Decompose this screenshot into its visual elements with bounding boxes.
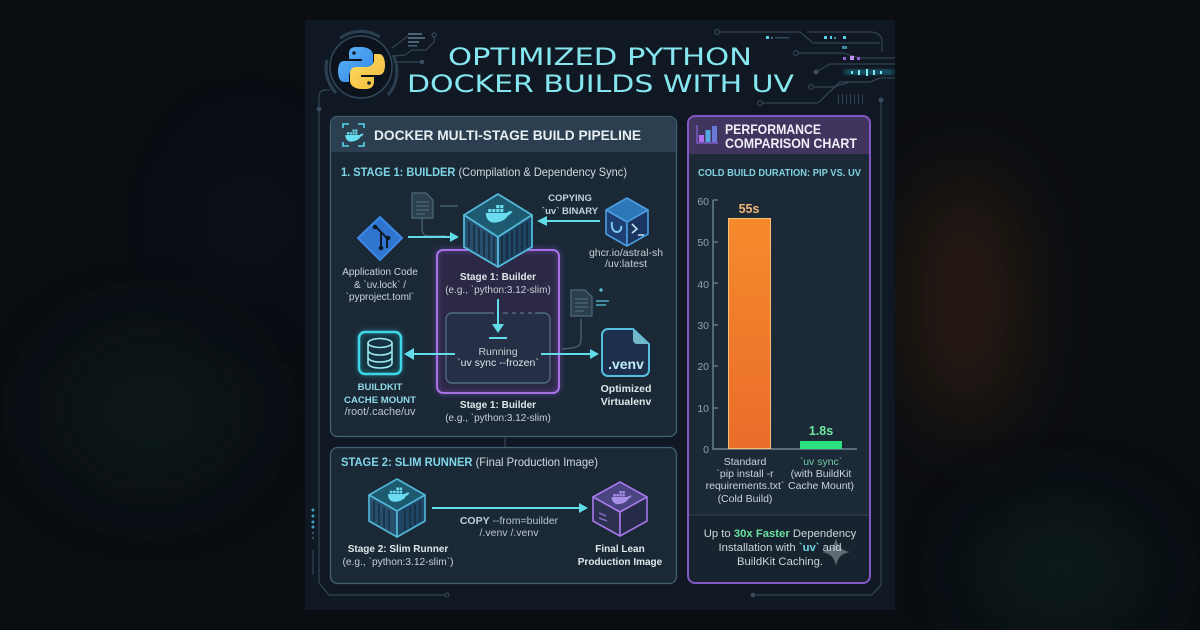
title: OPTIMIZED PYTHON	[448, 43, 752, 71]
application code label: `pyproject.toml`	[346, 291, 414, 303]
bar chart: requirements.txt`	[706, 480, 784, 492]
stage 1 purple box	[437, 250, 559, 393]
inner run box	[446, 313, 550, 383]
copying label: COPYING	[548, 193, 592, 204]
running label: Running	[478, 346, 518, 358]
chart footer	[689, 515, 869, 582]
chart heading	[725, 121, 857, 151]
icon: sparkle	[822, 538, 850, 566]
final image label: Final Lean	[595, 544, 645, 555]
chart heading: COMPARISON CHART	[725, 135, 857, 151]
bar chart: 40	[697, 279, 709, 291]
arrow: down to running	[489, 299, 507, 338]
application code label: Application Code	[342, 267, 418, 278]
cache label: /root/.cache/uv	[345, 406, 416, 418]
bar chart: `pip install -r	[716, 468, 774, 480]
ghcr label: /uv:latest	[605, 258, 647, 270]
bar chart: 60	[697, 196, 709, 208]
panel: stage 2 slim runner	[330, 448, 676, 584]
icon: document right	[562, 288, 609, 349]
slim runner label: Stage 2: Slim Runner	[348, 544, 448, 555]
venv label: Optimized	[601, 383, 651, 395]
bar chart: (with BuildKit	[791, 468, 851, 480]
callout: BuildKit Caching.	[737, 556, 823, 568]
bar chart: 55s	[739, 202, 759, 216]
running label: `uv sync --frozen`	[457, 357, 539, 369]
panel: performance comparison chart	[688, 116, 870, 583]
bar chart: Cache Mount)	[788, 480, 854, 492]
icon: python logo	[326, 31, 397, 98]
arrow: to cache	[404, 348, 455, 360]
builder label: Stage 1: Builder	[460, 272, 536, 283]
venv label: Virtualenv	[601, 396, 651, 408]
title	[407, 43, 795, 98]
icon: final image cube	[593, 482, 647, 536]
callout: Installation with `uv` and	[718, 542, 842, 554]
arrow: copying uv binary	[537, 216, 600, 226]
bar chart: 0	[703, 444, 709, 456]
copying label: `uv` BINARY	[542, 206, 599, 217]
callout: Up to 30x Faster Dependency	[704, 528, 856, 540]
cache label: BUILDKIT	[358, 382, 403, 393]
panel heading: DOCKER MULTI-STAGE BUILD PIPELINE	[374, 127, 641, 143]
stage 2 heading: STAGE 2: SLIM RUNNER (Final Production Image)	[341, 455, 598, 469]
builder label: (e.g., `python:3.12-slim)	[445, 284, 551, 296]
builder label lower: Stage 1: Builder	[460, 400, 536, 411]
ghcr label: ghcr.io/astral-sh	[589, 247, 663, 259]
bar chart: 10	[697, 403, 709, 415]
bar chart: `uv sync`	[800, 456, 842, 468]
circuit decoration	[317, 30, 895, 597]
copy label: COPY --from=builder	[460, 515, 558, 527]
copy label: /.venv /.venv	[480, 527, 539, 539]
stage 1 heading: 1. STAGE 1: BUILDER (Compilation & Dependency Sync)	[341, 165, 627, 179]
bar chart: 50	[697, 237, 709, 249]
panel: docker multi-stage build pipeline	[330, 116, 676, 436]
chart header	[689, 117, 869, 154]
icon: cache database	[359, 332, 401, 374]
slim runner label: (e.g., `python:3.12-slim`)	[343, 556, 453, 568]
bar chart	[697, 196, 857, 505]
bar chart: 30	[697, 320, 709, 332]
panel header	[331, 117, 676, 152]
circuit data dots	[312, 33, 893, 575]
arrow: to venv	[541, 349, 599, 359]
icon: uv binary cube	[606, 198, 648, 246]
icon: document top	[412, 193, 458, 236]
arrow: code to builder	[408, 232, 459, 242]
application code label: & `uv.lock` /	[354, 279, 406, 291]
cache label: CACHE MOUNT	[344, 395, 416, 406]
bar chart: 20	[697, 361, 709, 373]
final image label: Production Image	[578, 557, 663, 568]
icon: docker whale in frame	[343, 124, 364, 146]
icon: builder container cube	[464, 194, 532, 267]
title: DOCKER BUILDS WITH UV	[407, 70, 795, 98]
bar chart: 1.8s	[809, 424, 833, 438]
icon: venv file	[602, 329, 649, 376]
icon: git diamond	[358, 217, 402, 260]
bar chart: Standard	[724, 456, 766, 468]
icon: bar chart	[697, 125, 718, 143]
arrow: copy from builder	[432, 503, 588, 513]
chart heading: PERFORMANCE	[725, 121, 821, 137]
icon: venv file: .venv	[608, 356, 644, 372]
chart subtitle: COLD BUILD DURATION: PIP VS. UV	[698, 167, 861, 179]
builder label lower: (e.g., `python:3.12-slim)	[445, 412, 551, 424]
central poster background	[305, 20, 895, 610]
bar chart: (Cold Build)	[718, 493, 772, 505]
icon: slim runner cube	[369, 479, 425, 537]
